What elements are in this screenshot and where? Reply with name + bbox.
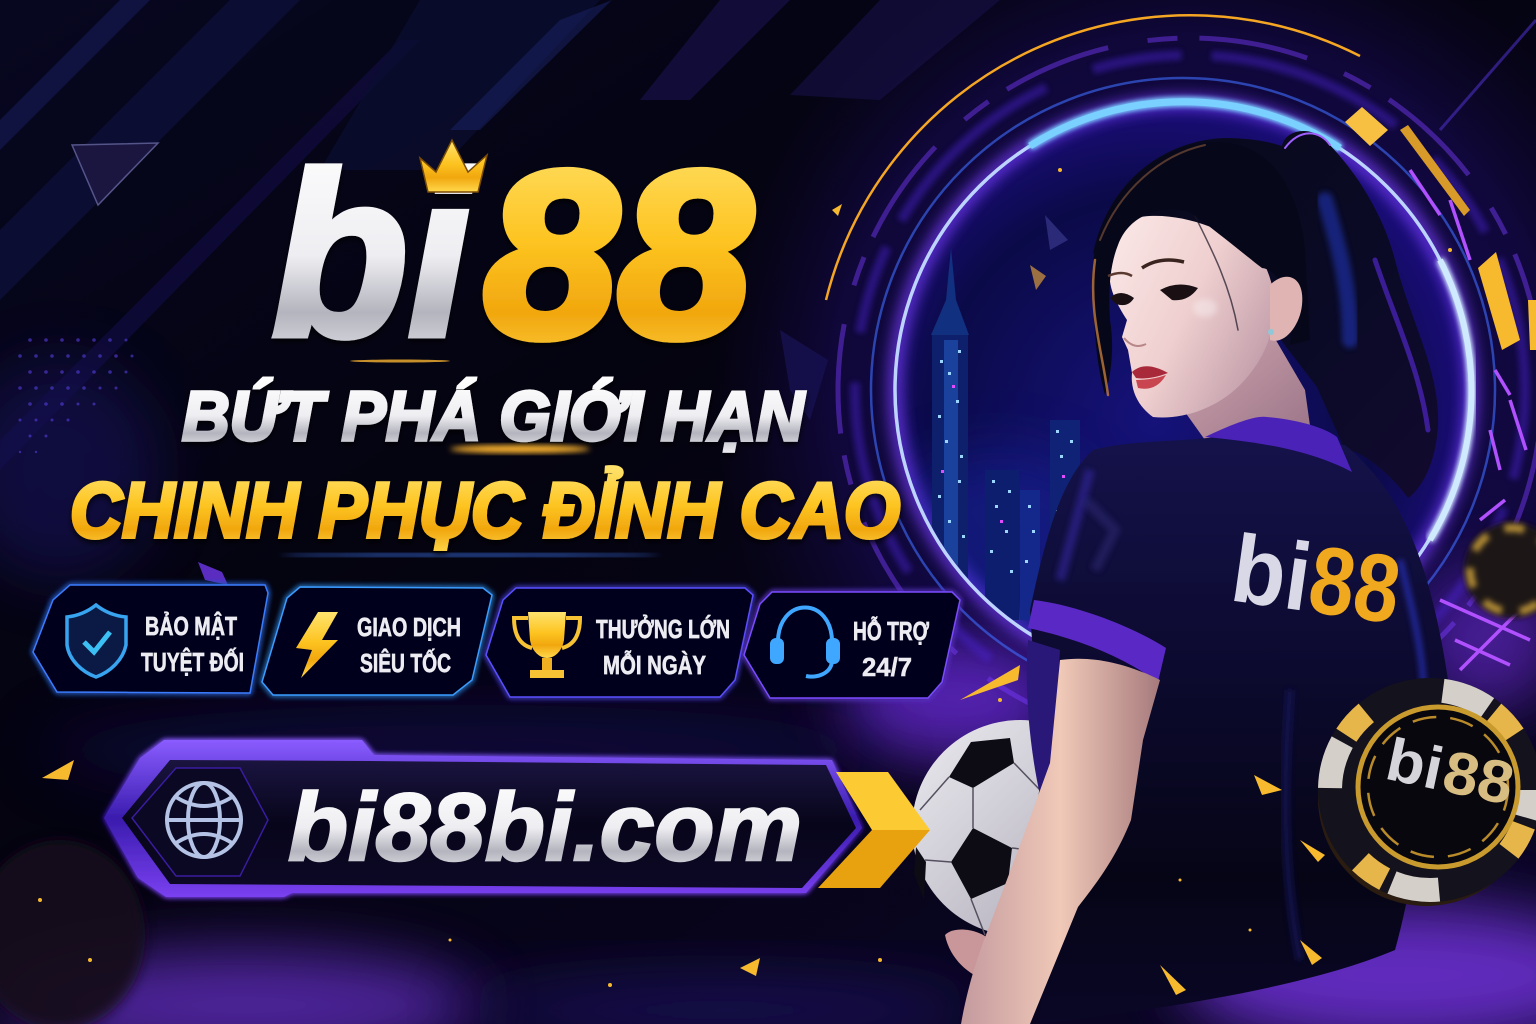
badge: security [33, 585, 268, 693]
icon: lightning [296, 612, 338, 678]
sleeve trim [1028, 600, 1166, 682]
badge: daily rewards [486, 588, 753, 697]
badge: support [744, 592, 960, 698]
url bar [104, 740, 862, 897]
jersey sheen [1060, 470, 1424, 960]
collar [1205, 417, 1352, 472]
logo [272, 123, 752, 387]
jersey [1030, 437, 1448, 1024]
icon: globe [167, 783, 241, 857]
headline flare [280, 360, 660, 556]
headline line 2: CHINH PHỤC ĐỈNH CAO [70, 466, 900, 554]
halftone dots [18, 338, 134, 453]
icon: crown [420, 140, 487, 192]
ear [1270, 277, 1302, 341]
logo: 88 [484, 123, 752, 387]
poker chip small [1464, 522, 1536, 618]
football [914, 720, 1040, 936]
badge: daily rewards: MỖI NGÀY [603, 650, 706, 680]
badge: daily rewards: THƯỞNG LỚN [596, 613, 730, 644]
badge: fast transactions: GIAO DỊCH [357, 612, 461, 642]
woman footballer [1028, 131, 1448, 1024]
badge: fast transactions: SIÊU TỐC [360, 648, 451, 678]
face [1110, 216, 1274, 418]
globe plate [132, 768, 268, 876]
jersey logo: 88 [1303, 526, 1407, 644]
arrow chevron [818, 772, 930, 888]
facial features [1108, 260, 1217, 389]
icon: headset [772, 608, 838, 677]
hair front [1092, 142, 1310, 395]
url bar frame [104, 740, 862, 897]
badge: support: 24/7 [862, 652, 912, 682]
neck [1180, 330, 1312, 440]
jersey logo [1225, 515, 1407, 644]
logo wordmark: bi [272, 126, 474, 385]
earring [1268, 329, 1274, 335]
jersey logo: bi [1225, 515, 1318, 632]
poker chip large [1318, 678, 1536, 906]
arm [961, 659, 1160, 1024]
ponytail and back hair [1093, 131, 1438, 498]
headline line 1: BỨT PHÁ GIỚI HẠN [182, 377, 805, 455]
city skyline [912, 215, 1082, 632]
poker chip large: 88 [1437, 737, 1520, 818]
icon: shield [67, 605, 126, 677]
badge: fast transactions [262, 587, 492, 695]
icon: trophy [514, 612, 580, 678]
poker chip large: bi [1381, 725, 1449, 803]
sparks [38, 168, 1452, 995]
hand [945, 930, 990, 980]
hair highlights [1093, 133, 1428, 430]
url text: bi88bi.com [288, 774, 802, 881]
badge: support: HỖ TRỢ [853, 616, 930, 646]
badge: security: BẢO MẬT [145, 611, 237, 641]
neon ring portal [826, 15, 1536, 742]
badge: security: TUYỆT ĐỐI [141, 647, 244, 677]
jersey side panel [1027, 640, 1060, 795]
